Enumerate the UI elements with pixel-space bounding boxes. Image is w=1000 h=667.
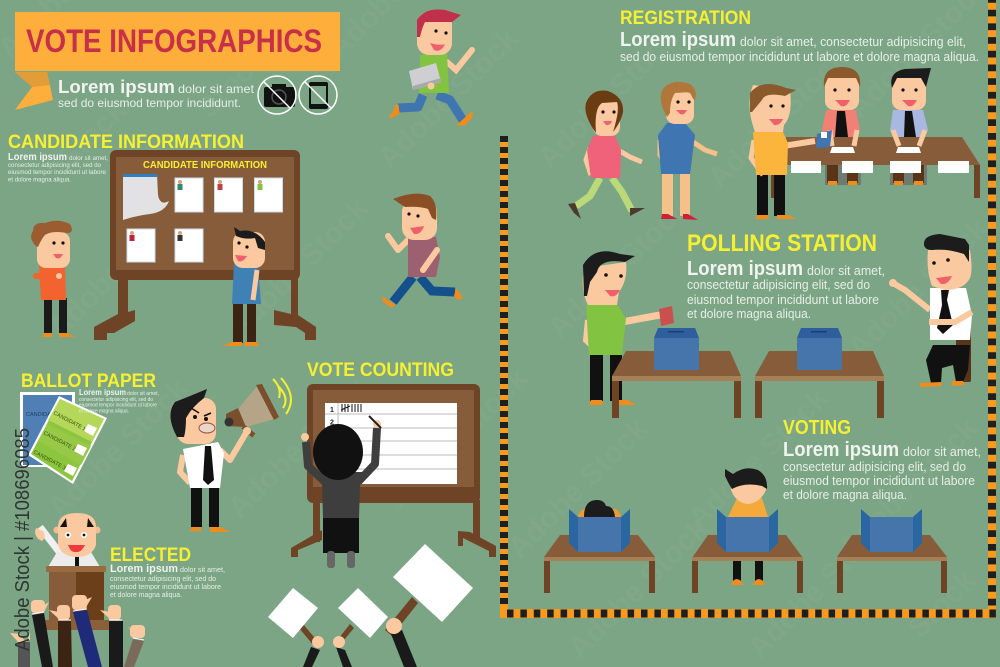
text: voting body: eiusmod tempor incididunt ut labore [783, 474, 975, 488]
text: elected body: Lorem ipsum [110, 563, 178, 575]
text: ballot paper body: eiusmod tempor incididunt ut labore [79, 402, 157, 408]
heading: elected: ELECTED [110, 545, 191, 566]
stock id text: Adobe Stock | #108696085 [12, 428, 34, 651]
text: candidate information body: et dolore magna aliqua. [8, 176, 71, 184]
text: ballot paper body: Lorem ipsum [79, 388, 126, 397]
text: voting body: dolor sit amet, [903, 445, 981, 459]
ballot papers: CANDIDATE 1 [52, 410, 87, 433]
crowd hands [10, 595, 145, 667]
text: voting body [783, 439, 981, 502]
figure: man viewing board [222, 227, 265, 346]
text: elected body [110, 563, 225, 599]
text: polling station body: consectetur adipisicing elit, sed do [687, 278, 870, 292]
text: registration body: Lorem ipsum [620, 29, 736, 51]
text: ballot paper body: et dolore magna aliqua. [79, 408, 129, 414]
counting board: 1 [330, 407, 334, 414]
figure: man in yellow [749, 84, 832, 219]
text: Adobe Stock [742, 512, 895, 665]
heading: voting: VOTING [783, 417, 851, 439]
figure: elected speaker at podium [35, 513, 109, 630]
text: Stock [52, 94, 133, 175]
text: Stock [192, 44, 273, 125]
text: polling station body [687, 258, 885, 321]
text: Adobe Stock [222, 372, 375, 525]
text: polling station body: dolor sit amet, [807, 264, 885, 278]
heading: candidate information: CANDIDATE INFORMATION [8, 132, 244, 153]
icon: no phone [299, 76, 337, 114]
text: polling station body: Lorem ipsum [687, 258, 803, 280]
figure: woman in pink [568, 90, 645, 219]
polling table 2 with ballot box [755, 328, 884, 418]
text: Adobe Stock [222, 192, 375, 345]
text: candidate information body: dolor sit amet, [69, 155, 108, 162]
voting booth 1 with person [544, 500, 655, 593]
text: elected body: consectetur adipisicing elit, sed do [110, 576, 216, 583]
text: ballot paper body [79, 388, 159, 414]
text: Adobe Stock [372, 22, 525, 175]
text: Adobe Stock [532, 22, 685, 175]
counting board: 2 [330, 420, 334, 426]
counting board [291, 384, 496, 557]
icon: no camera [258, 76, 296, 114]
figure: runner with tablet [390, 9, 472, 124]
ballot papers: CANDIDATE 2 [42, 430, 77, 453]
title banner [15, 12, 340, 110]
title banner: VOTE INFOGRAPHICS [26, 23, 322, 59]
heading: ballot paper: BALLOT PAPER [21, 371, 156, 392]
text: Adobe Stock [842, 212, 995, 365]
voting booth 2 with person [692, 468, 803, 593]
heading: polling station: POLLING STATION [687, 230, 877, 257]
text: Adobe Stock [542, 192, 695, 345]
registration table legs and seated legs [771, 165, 980, 198]
text: elected body: et dolore magna aliqua. [110, 592, 182, 599]
voting booth 3 [837, 509, 947, 593]
text: registration body [620, 29, 979, 64]
text: Adobe Stock [502, 412, 655, 565]
text: Adobe Stock [42, 372, 195, 525]
figure: official 2 [890, 68, 931, 140]
figure: runner in maroon shirt [382, 194, 463, 308]
protest signs [268, 544, 473, 667]
text: Adobe Stock [702, 42, 855, 195]
text: voting body: consectetur adipisicing elit, sed do [783, 460, 966, 474]
figure: official 1 [822, 67, 860, 140]
table top with name cards [786, 130, 980, 173]
heading: vote counting: VOTE COUNTING [307, 360, 454, 381]
candidate board [94, 150, 316, 340]
text: elected body: dolor sit amet, [180, 567, 225, 574]
intro text: dolor sit amet [178, 82, 255, 96]
figure: woman in blue [658, 82, 717, 220]
text: elected body: eiusmod tempor incididunt ut labore [110, 584, 221, 591]
text: voting body: et dolore magna aliqua. [783, 488, 907, 502]
figure: polling official [889, 234, 972, 387]
text: Adobe Stock [562, 512, 715, 665]
figure: person counting votes [301, 416, 381, 568]
figure: man with megaphone [170, 378, 291, 532]
text: candidate information body: eiusmod tempor incididunt ut labore [8, 169, 106, 176]
dashed border: polling area [500, 0, 996, 618]
text: ballot paper body: consectetur adipisicing elit, sed do [79, 397, 153, 403]
text: voting body: Lorem ipsum [783, 439, 899, 461]
text: registration body: dolor sit amet, consectetur adipisicing elit, [740, 35, 966, 49]
text: candidate information body: consectetur adipisicing elit, sed do [8, 162, 101, 169]
text: polling station body: eiusmod tempor incididunt ut labore [687, 293, 879, 307]
text: Adobe Stock [42, 192, 195, 345]
figure: curly-haired man [31, 221, 75, 337]
polling table 1 with ballot box [612, 328, 741, 418]
text: Adobe Stock [382, 362, 535, 515]
ballot papers [20, 392, 107, 484]
ballot papers: CANDIDATE [26, 412, 58, 418]
text: candidate information body [8, 152, 108, 184]
heading: registration: REGISTRATION [620, 8, 751, 29]
intro text: sed do eiusmod tempor incididunt. [58, 96, 241, 110]
text: Adobe Stock [682, 382, 835, 535]
figure: voter in green [583, 251, 674, 405]
ballot papers: CANDIDATE 3 [32, 449, 67, 472]
text: candidate information body: Lorem ipsum [8, 152, 67, 163]
intro text: Lorem ipsum [58, 77, 175, 97]
text: Adobe Stock [832, 412, 985, 565]
intro text [58, 77, 255, 110]
candidate board: CANDIDATE INFORMATION [143, 159, 267, 171]
text: registration body: sed do eiusmod tempor incididunt ut labore et dolore magna aliqua. [620, 50, 979, 64]
text: ballot paper body: dolor sit amet, [127, 391, 159, 397]
text: polling station body: et dolore magna aliqua. [687, 307, 811, 321]
text: Stock [902, 564, 983, 645]
